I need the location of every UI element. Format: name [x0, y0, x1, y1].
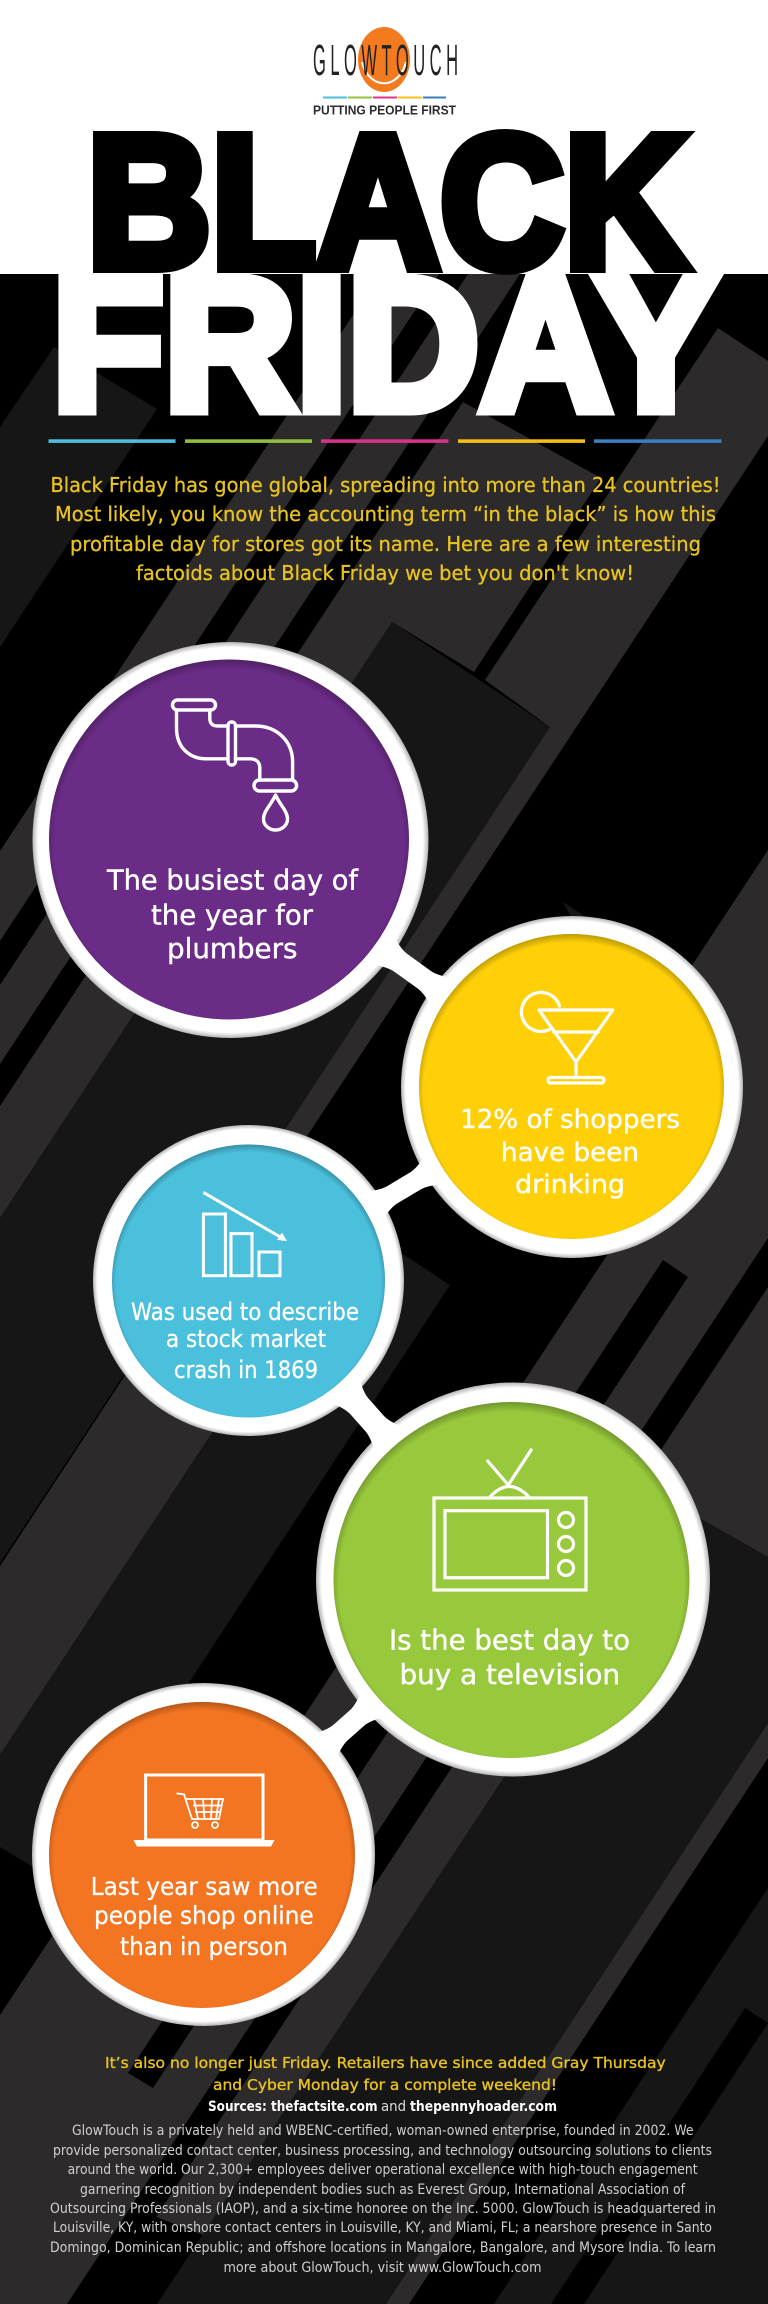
sources line: and: [381, 2099, 406, 2115]
connector: green to orange: [313, 1691, 385, 1760]
panel: stock market fact: [93, 1125, 404, 1436]
colour divider bars: [48, 439, 722, 443]
intro text: factoids about Black Friday we bet you don't know!: [136, 561, 634, 585]
plumbers text: the year for: [151, 899, 314, 931]
icon: television: [434, 1449, 586, 1590]
panel: online shopping fact: [32, 1683, 375, 2026]
company boilerplate text: GlowTouch is a privately held and WBENC-certified, woman-owned enterprise, founded in 2002. We: [72, 2123, 694, 2139]
icon: falling bar chart: [203, 1192, 286, 1276]
white header background: [0, 0, 768, 274]
icon: laptop with cart: [134, 1775, 274, 1846]
title: FRIDAY: FRIDAY: [52, 240, 717, 450]
sources line: Sources: thefactsite.com: [208, 2099, 378, 2115]
panel: television fact: [316, 1382, 710, 1776]
icon: leaking pipe: [172, 700, 297, 830]
logo tagline: PUTTING PEOPLE FIRST: [313, 102, 456, 118]
company boilerplate text: garnering recognition by independent bodies such as Everest Group, International Association of: [80, 2182, 686, 2198]
television text: Is the best day to: [389, 1624, 630, 1656]
plumbers text: The busiest day of: [106, 865, 359, 897]
intro text: Most likely, you know the accounting term “in the black” is how this: [55, 502, 716, 526]
stock market text: Was used to describe: [131, 1298, 359, 1326]
online shopping text: than in person: [120, 1932, 288, 1961]
television text: [389, 1624, 630, 1691]
panel: plumbers fact: [32, 642, 428, 1038]
closing gold callout: It’s also no longer just Friday. Retailers have since added Gray Thursday: [105, 2054, 666, 2072]
title: BLACK: BLACK: [87, 97, 688, 308]
connector: yellow to blue: [365, 1155, 443, 1221]
sources line: [208, 2099, 557, 2115]
panel: drinking fact: [401, 916, 743, 1258]
closing gold callout: [105, 2054, 666, 2094]
drinking text: [460, 1105, 680, 1200]
drinking text: have been: [501, 1138, 639, 1168]
online shopping text: people shop online: [94, 1901, 314, 1930]
stock market text: crash in 1869: [174, 1356, 318, 1384]
company boilerplate text: more about GlowTouch, visit www.GlowTouch.com: [224, 2260, 542, 2276]
connector: purple to yellow: [372, 935, 453, 1007]
online shopping text: [91, 1872, 318, 1961]
sources line: thepennyhoader.com: [410, 2099, 557, 2115]
logo colour bar: [323, 96, 446, 98]
logo orange disc: [358, 27, 410, 92]
company boilerplate text: around the world. Our 2,300+ employees deliver operational excellence with high-touch engagement: [68, 2162, 698, 2178]
online shopping text: Last year saw more: [91, 1872, 318, 1901]
drinking text: 12% of shoppers: [460, 1105, 680, 1135]
plumbers text: [106, 865, 359, 965]
stock market text: a stock market: [166, 1325, 326, 1353]
intro text: Black Friday has gone global, spreading into more than 24 countries!: [50, 473, 720, 497]
connector: blue to green: [331, 1377, 403, 1453]
drinking text: drinking: [515, 1170, 625, 1200]
logo wordmark: GLOWTOUCH: [313, 35, 463, 84]
closing gold callout: and Cyber Monday for a complete weekend!: [213, 2076, 557, 2094]
intro text: [50, 473, 720, 585]
intro text: profitable day for stores got its name. Here are a few interesting: [70, 532, 701, 556]
stock market text: [131, 1298, 359, 1384]
icon: martini glass: [521, 992, 613, 1083]
company boilerplate text: [50, 2123, 716, 2276]
plumbers text: plumbers: [167, 933, 298, 965]
logo: GlowTouch: [313, 27, 463, 118]
television text: buy a television: [400, 1659, 620, 1691]
